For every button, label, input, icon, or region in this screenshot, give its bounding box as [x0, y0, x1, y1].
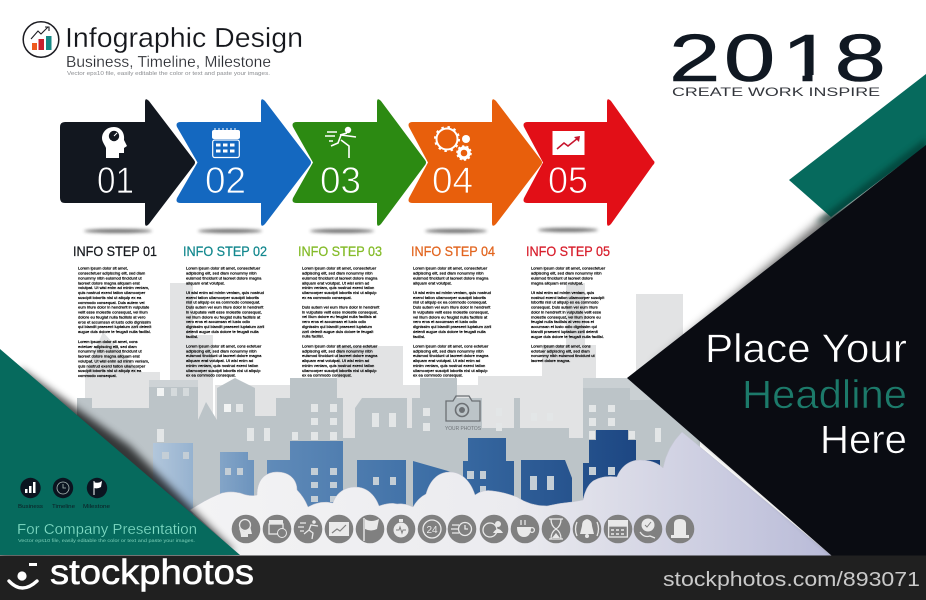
- icon: camera: [446, 396, 480, 421]
- icon: stopwatch: [387, 515, 415, 543]
- body copy: aliquam erat volutpat.: [413, 280, 452, 285]
- body copy: nisl ut aliquip ex ea commodo consequat.: [413, 300, 487, 305]
- body copy: Lorem ipsum dolor sit amet,: [78, 266, 128, 271]
- body copy: delenit augue duis dolore te feugait nulla: [413, 329, 486, 334]
- icon: clock person: [480, 515, 508, 543]
- title block: [65, 22, 303, 77]
- body copy: in vulputate velit esse molestie consequat,: [413, 309, 489, 314]
- city skyline illustration: [0, 283, 700, 555]
- building windows: [157, 388, 661, 502]
- heading: info step 02: INFO STEP 02: [183, 243, 267, 259]
- arrow 04: 04: [432, 160, 473, 201]
- icon: calendar: [604, 515, 632, 543]
- body copy: aliquam erat volutpat. Ut wisi enim ad: [302, 280, 369, 285]
- body copy: euismod tincidunt ut laoreet dolore magna: [302, 275, 378, 280]
- body copy: vero eros et accumsan et iusto odio: [413, 319, 478, 324]
- body copy: eros et accumsan et iusto odio dignissim: [78, 319, 152, 324]
- body copy: ex ea commodo consequat.: [302, 373, 352, 378]
- shadow: band under dark triangle: [815, 138, 926, 222]
- body copy: adipiscing elit, sed diam nonummy nibh: [531, 271, 602, 276]
- body copy: ullamcorper suscipit lobortis nisl ut aliquip: [302, 368, 377, 373]
- body copy: adipiscing elit, sed diam nonummy nibh: [186, 271, 257, 276]
- panel: left teal triangle: [0, 349, 240, 555]
- tagline: CREATE WORK INSPIRE: [672, 87, 881, 99]
- body copy: aliquam erat volutpat. Ut wisi enim ad: [186, 358, 253, 363]
- body copy: augue duis dolore te feugait nulla facilisi.: [78, 329, 151, 334]
- body copy: consequat. Duis autem vel eum iriure: [531, 305, 599, 310]
- icon labels: Milestone: [83, 504, 110, 510]
- panel: dark triangle with headline: [627, 145, 926, 556]
- body copy: ex ea commodo consequat.: [302, 295, 352, 300]
- subtitle note: Vector eps10 file, easily editable the color or text and paste your images.: [67, 71, 270, 77]
- body copy: adipiscing elit, sed diam nonummy nibh: [302, 348, 373, 353]
- headline: Here: [820, 418, 907, 462]
- icon labels: Timeline: [52, 504, 75, 510]
- cloud band: [190, 432, 832, 556]
- body copy: magna aliquam erat volutpat.: [531, 280, 583, 285]
- arrow 04: [408, 99, 542, 226]
- arrow 02: [176, 99, 311, 226]
- body copy: adipiscing elit, sed diam nonummy nibh: [186, 348, 257, 353]
- subtext: Vector eps10 file, easily editable the color or text and paste your images.: [18, 538, 195, 543]
- body copy: Ut wisi enim ad minim veniam, quis nostrud: [413, 290, 491, 295]
- body copy: nisl ut aliquip ex ea commodo consequat.: [186, 300, 260, 305]
- step 3 text: [298, 243, 382, 378]
- body copy: Lorem ipsum dolor sit amet, cons: [78, 339, 138, 344]
- body copy: aliquam erat volutpat. Ut wisi enim ad: [302, 358, 369, 363]
- body copy: nonummy nibh euismod tincidunt ut: [531, 353, 596, 358]
- headline: Headline: [742, 373, 907, 417]
- body copy: eum iriure dolor in hendrerit in vulputate: [78, 305, 150, 310]
- icon: 24 hours: 24: [426, 525, 438, 536]
- body copy: in vulputate velit esse molestie consequat,: [302, 309, 378, 314]
- body copy: ullamcorper suscipit lobortis nisl ut aliquip: [302, 290, 377, 295]
- body copy: Lorem ipsum dolor sit amet, cons ectetuer: [186, 343, 262, 348]
- icon row: [232, 515, 694, 543]
- body copy: ex ea commodo consequat.: [413, 373, 463, 378]
- icon: coffee cup: [511, 515, 539, 543]
- arrow 02: 02: [205, 160, 246, 201]
- body copy: [531, 266, 606, 363]
- body copy: blandit praesent luptatum zzril delenit: [531, 329, 599, 334]
- body copy: volutpat. Ut wisi enim ad minim veniam,: [78, 285, 149, 290]
- icon: calendar: [212, 128, 240, 158]
- body copy: vel illum dolore eu feugiat nulla facilisis at: [186, 314, 261, 319]
- arrow 03: 03: [320, 160, 361, 201]
- title: Infographic Design: [65, 22, 303, 53]
- body copy: nonummy nibh euismod tincidunt ut: [78, 349, 143, 354]
- body copy: adipiscing elit, sed diam nonummy nibh: [413, 271, 484, 276]
- body copy: Lorem ipsum dolor sit amet, cons ectetuer: [413, 343, 489, 348]
- body copy: Ut wisi enim ad minim veniam, quis nostrud: [186, 290, 264, 295]
- body copy: laoreet dolore magna.: [531, 358, 570, 363]
- body copy: aliquam erat volutpat.: [186, 280, 225, 285]
- body copy: euismod tincidunt ut laoreet dolore magna: [302, 353, 378, 358]
- body copy: quis nostrud exerci tation ullamcorper: [78, 290, 146, 295]
- heading: for company presentation: For Company Presentation: [17, 521, 197, 538]
- body copy: Ut wisi enim ad minim veniam, quis: [531, 290, 594, 295]
- body copy: [302, 266, 380, 378]
- watermark url: stockphotos.com/893071: [663, 568, 920, 591]
- body copy: Lorem ipsum dolor sit amet, cons ectetuer: [302, 343, 378, 348]
- heading: info step 04: INFO STEP 04: [411, 243, 495, 259]
- camera placeholder: your photos: YOUR PHOTOS: [445, 426, 481, 432]
- body copy: commodo consequat.: [78, 373, 117, 378]
- icon: head with clock: [102, 127, 127, 158]
- body copy: volutpat. Ut wisi enim ad minim veniam,: [78, 358, 149, 363]
- shadow: left teal triangle: [0, 368, 235, 555]
- step 2 text: [183, 243, 267, 378]
- body copy: Lorem ipsum dolor sit amet, consectetuer: [186, 266, 261, 271]
- body copy: ullamcorper suscipit lobortis nisl ut aliquip: [186, 368, 261, 373]
- body copy: laoreet dolore magna aliquam erat: [78, 280, 141, 285]
- body copy: Duis autem vel eum iriure dolor in hendrerit: [413, 305, 491, 310]
- heading: info step 01: INFO STEP 01: [73, 243, 157, 259]
- body copy: lobortis nisl ut aliquip ex ea commodo: [531, 300, 599, 305]
- icon: gears: [435, 127, 471, 160]
- icon: head: [232, 515, 260, 543]
- camera placeholder: your photos: [445, 396, 481, 432]
- body copy: dignissim qui blandit praesent luptatum zzril: [186, 324, 264, 329]
- mid grey buildings: [0, 378, 700, 555]
- body copy: suscipit lobortis nisl ut aliquip ex ea: [78, 295, 142, 300]
- arrow shadows: [84, 228, 598, 233]
- body copy: velit esse molestie consequat, vel illum: [78, 310, 148, 315]
- body copy: facilisi.: [413, 334, 425, 339]
- year 2018: 2018: [669, 21, 886, 96]
- body copy: [78, 266, 152, 378]
- heading: info step 05: INFO STEP 05: [526, 243, 610, 259]
- body copy: minim veniam, quis nostrud exerci tation: [302, 363, 374, 368]
- body copy: ectetuer adipiscing elit, sed diam: [78, 344, 137, 349]
- body copy: [413, 266, 491, 378]
- step arrows: [60, 99, 654, 226]
- body copy: Duis autem vel eum iriure dolor in hendrerit: [186, 305, 264, 310]
- icon: flag: [356, 515, 384, 543]
- icon: fast clock: [448, 515, 476, 543]
- icon: calendar clock: [263, 515, 291, 543]
- step 5 text: [526, 243, 610, 363]
- body copy: minim veniam, quis nostrud exerci tation: [302, 285, 374, 290]
- body copy: dignissim qui blandit praesent luptatum: [302, 324, 373, 329]
- icon: runner: [325, 127, 356, 158]
- light background buildings: [85, 283, 683, 455]
- watermark logo: [9, 563, 37, 588]
- body copy: vero eros et accumsan et iusto odio: [186, 319, 251, 324]
- arrow 01: 01: [97, 160, 134, 201]
- body copy: nonummy nibh euismod tincidunt ut: [78, 275, 143, 280]
- body copy: vel illum dolore eu feugiat nulla facilisis at: [413, 314, 488, 319]
- body copy: exerci tation ullamcorper suscipit lobortis: [413, 295, 486, 300]
- watermark bar: [0, 553, 926, 600]
- watermark wordmark: stockphotos: [50, 553, 254, 592]
- body copy: adipiscing elit, sed diam nonummy nibh: [302, 271, 373, 276]
- icon: business bars circle: [20, 478, 41, 498]
- icon: runner: [294, 515, 322, 543]
- arrow 05: [524, 99, 654, 226]
- step 1 text: [73, 243, 157, 378]
- logo icon: [23, 22, 59, 57]
- body copy: euismod tincidunt ut laoreet dolore magna: [413, 353, 489, 358]
- icon: milestone flag circle: [87, 478, 107, 498]
- body copy: qui blandit praesent luptatum zzril delenit: [78, 324, 152, 329]
- body copy: euismod tincidunt ut laoreet dolore magna: [186, 353, 262, 358]
- body copy: minim veniam, quis nostrud exerci tation: [186, 363, 258, 368]
- body copy: consectetuer adipiscing elit, sed diam: [78, 271, 146, 276]
- body copy: euismod tincidunt ut laoreet dolore magna: [413, 275, 489, 280]
- body copy: accumsan et iusto odio dignissim qui: [531, 324, 597, 329]
- body copy: vel illum dolore eu feugiat nulla facilisis at: [302, 314, 377, 319]
- body copy: molestie consequat, vel illum dolore eu: [531, 314, 601, 319]
- body copy: ectetuer adipiscing elit, sed diam: [531, 348, 590, 353]
- icon: hourglass: [542, 515, 570, 543]
- icon: 24 hours: [418, 515, 446, 543]
- body copy: feugiat nulla facilisis at vero eros et: [531, 319, 595, 324]
- icon: chart: [552, 131, 584, 155]
- body copy: zzril delenit augue duis dolore te feugait: [302, 329, 374, 334]
- body copy: vero eros et accumsan et iusto odio: [302, 319, 367, 324]
- arrow 03: [292, 99, 426, 226]
- body copy: adipiscing elit, sed diam nonummy nibh: [413, 348, 484, 353]
- body copy: ex ea commodo consequat.: [186, 373, 236, 378]
- body copy: commodo consequat. Duis autem vel: [78, 300, 145, 305]
- body copy: nulla facilisi.: [302, 334, 324, 339]
- headline: [705, 327, 907, 462]
- body copy: dolor in hendrerit in vulputate velit esse: [531, 309, 602, 314]
- body copy: delenit augue duis dolore te feugait nulla: [186, 329, 259, 334]
- body copy: quis nostrud exerci tation ullamcorper: [78, 363, 146, 368]
- icon labels: [18, 504, 110, 510]
- body copy: laoreet dolore magna aliquam erat: [78, 354, 141, 359]
- body copy: Duis autem vel eum iriure dolor in hendrerit: [302, 304, 380, 309]
- step 4 text: [411, 243, 495, 378]
- body copy: nostrud exerci tation ullamcorper suscipit: [531, 295, 605, 300]
- body copy: aliquam erat volutpat. Ut wisi enim ad: [413, 358, 480, 363]
- body copy: euismod tincidunt ut laoreet dolore: [531, 275, 594, 280]
- heading: info step 03: INFO STEP 03: [298, 243, 382, 259]
- body copy: dolore eu feugiat nulla facilisis at vero: [78, 314, 146, 319]
- icon: chart: [325, 515, 353, 543]
- body copy: suscipit lobortis nisl ut aliquip ex ea: [78, 368, 142, 373]
- body copy: exerci tation ullamcorper suscipit lobortis: [186, 295, 259, 300]
- body copy: dignissim qui blandit praesent luptatum zzril: [413, 324, 491, 329]
- body copy: Lorem ipsum dolor sit amet, cons: [531, 343, 591, 348]
- arrow 05: 05: [548, 160, 588, 201]
- blue buildings: [153, 430, 660, 520]
- body copy: Lorem ipsum dolor sit amet, consectetuer: [302, 266, 377, 271]
- body copy: augue duis dolore te feugait nulla facilisi.: [531, 334, 604, 339]
- body copy: euismod tincidunt ut laoreet dolore magna: [186, 275, 262, 280]
- subtitle: Business, Timeline, Milestone: [66, 54, 271, 71]
- year block: [669, 21, 886, 99]
- body copy: in vulputate velit esse molestie consequat,: [186, 309, 262, 314]
- arrow 01: [60, 99, 195, 226]
- body copy: facilisi.: [186, 334, 198, 339]
- icon labels: Business: [18, 504, 43, 510]
- panel: teal band: [789, 74, 926, 217]
- shadow: lower edge of dark triangle: [700, 430, 845, 556]
- icon: bell: [573, 515, 601, 543]
- headline: Place Your: [705, 327, 907, 371]
- icon: timeline clock circle: [53, 478, 73, 498]
- icon: tombstone: [666, 515, 694, 543]
- body copy: [186, 266, 264, 378]
- body copy: minim veniam, quis nostrud exerci tation: [413, 363, 485, 368]
- body copy: Lorem ipsum dolor sit amet, consectetuer: [413, 266, 488, 271]
- icon: head check: [634, 515, 662, 543]
- body copy: Lorem ipsum dolor sit amet, consectetuer: [531, 266, 606, 271]
- shadow: right dark triangle: [654, 197, 920, 397]
- body copy: ullamcorper suscipit lobortis nisl ut aliquip: [413, 368, 488, 373]
